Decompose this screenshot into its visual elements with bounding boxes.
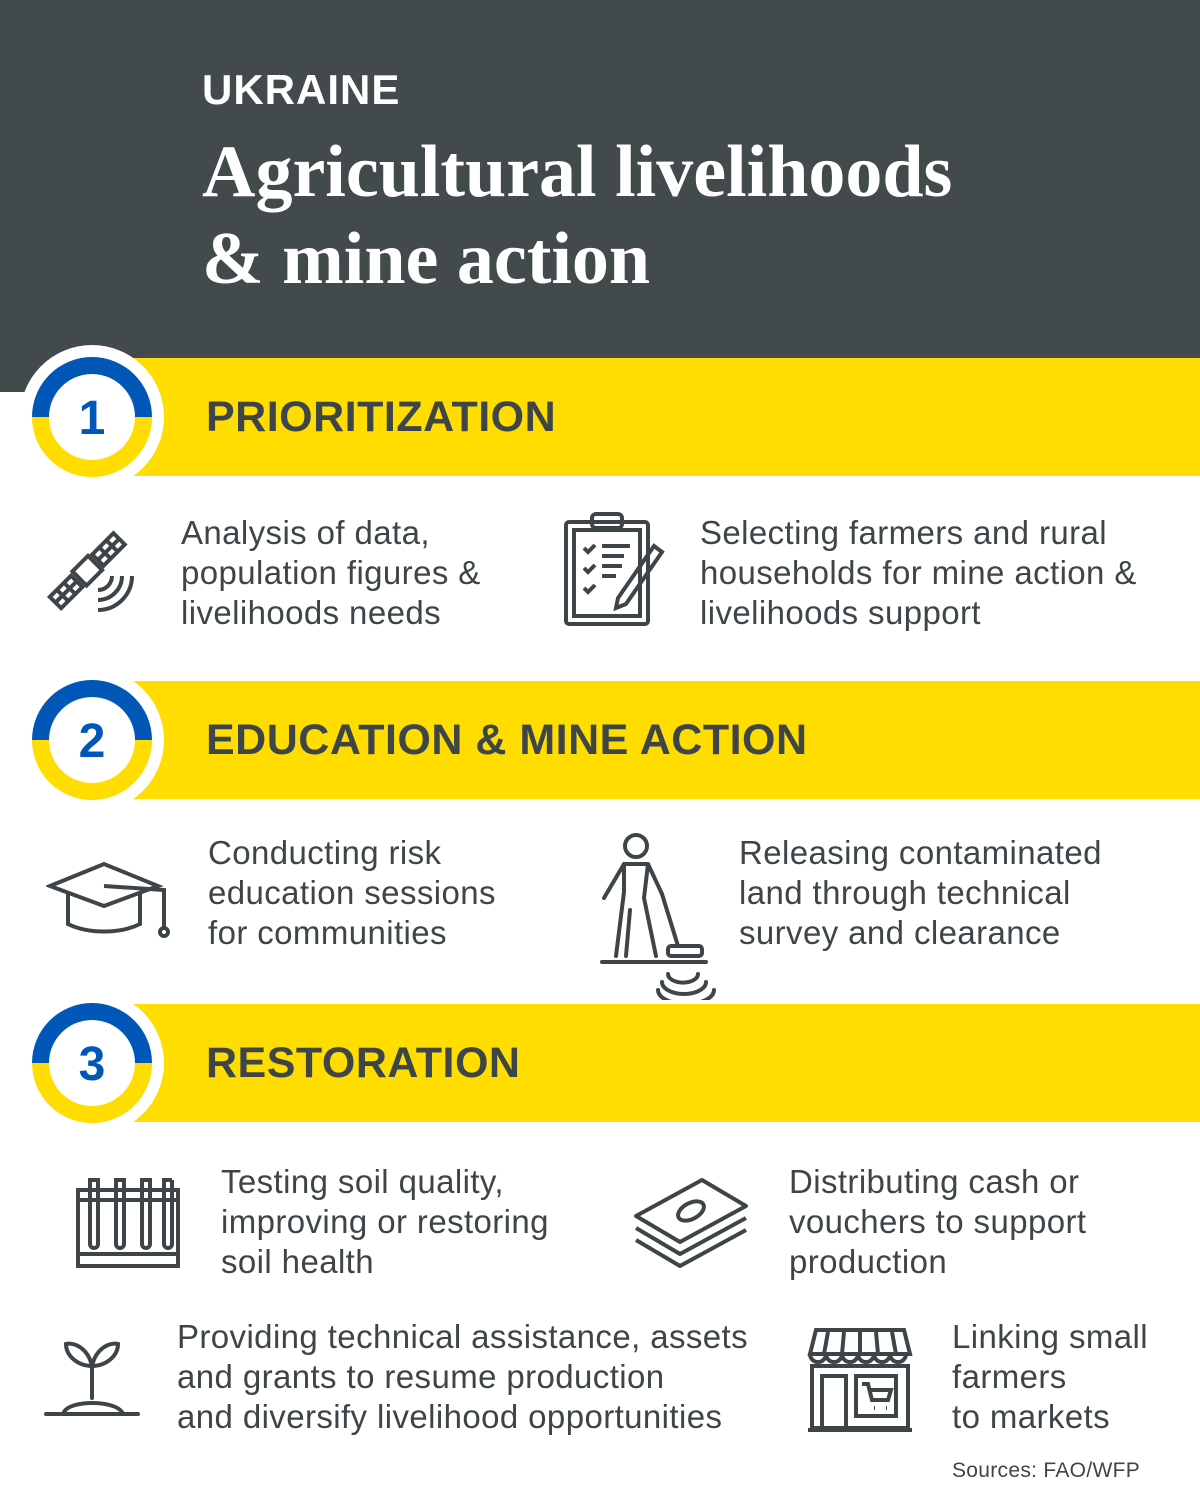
text: risk education: Conducting risk (208, 834, 441, 871)
text: technical assistance: and diversify livelihood opportunities (177, 1398, 722, 1435)
text: risk education: for communities (208, 914, 447, 951)
badge 1: 1 (79, 392, 105, 445)
title: & mine action (202, 218, 650, 300)
icon: satellite (47, 530, 134, 612)
text: cash: vouchers to support (789, 1203, 1086, 1240)
text: technical assistance: Providing technical assistance, assets (177, 1318, 748, 1355)
badge 3: 3 (79, 1038, 105, 1091)
section bar 1 (130, 358, 1200, 476)
text: selecting (700, 514, 1137, 631)
text: technical assistance: and grants to resume production (177, 1358, 665, 1395)
text: releasing land (739, 834, 1102, 951)
icon: graduation cap (46, 862, 170, 938)
section bar 1: PRIORITIZATION (206, 393, 556, 441)
badge 1 (20, 345, 164, 489)
text: soil: soil health (221, 1243, 374, 1280)
text: analysis: Analysis of data, (181, 514, 430, 551)
text: linking to markets: Linking small (952, 1318, 1148, 1355)
section bar 2 (130, 681, 1200, 799)
title (202, 131, 952, 300)
text: analysis: population figures & (181, 554, 481, 591)
header background (0, 0, 1200, 392)
text: analysis (181, 514, 481, 631)
icon: seedling (44, 1342, 140, 1416)
badge 2 (20, 668, 164, 812)
icon: test tubes (76, 1178, 180, 1268)
text: selecting: households for mine action & (700, 554, 1137, 591)
icon: cash stack (634, 1178, 748, 1268)
text: selecting: Selecting farmers and rural (700, 514, 1107, 551)
text: technical assistance (177, 1318, 748, 1435)
text: analysis: livelihoods needs (181, 594, 441, 631)
section bar 3 (130, 1004, 1200, 1122)
header text (202, 66, 952, 300)
text: linking to markets: farmers (952, 1358, 1067, 1395)
text: selecting: livelihoods support (700, 594, 981, 631)
badge 3 (20, 991, 164, 1135)
section bar 2: EDUCATION & MINE ACTION (206, 716, 808, 764)
text: linking to markets (952, 1318, 1148, 1435)
text: releasing land: land through technical (739, 874, 1071, 911)
sources: Sources: FAO/WFP (952, 1459, 1140, 1482)
text: cash: production (789, 1243, 947, 1280)
text: releasing land: Releasing contaminated (739, 834, 1102, 871)
text: releasing land: survey and clearance (739, 914, 1061, 951)
title: Agricultural livelihoods (202, 131, 952, 213)
text: cash (789, 1163, 1086, 1280)
text: soil: improving or restoring (221, 1203, 549, 1240)
kicker: UKRAINE: UKRAINE (202, 66, 400, 113)
text: linking to markets: to markets (952, 1398, 1110, 1435)
text: soil (221, 1163, 549, 1280)
text: risk education (208, 834, 496, 951)
icon: clipboard (564, 512, 665, 626)
badge 2: 2 (79, 715, 105, 768)
section bar 3: RESTORATION (206, 1039, 520, 1087)
icon: deminer with detector (600, 833, 716, 1000)
text: cash: Distributing cash or (789, 1163, 1079, 1200)
text: risk education: education sessions (208, 874, 496, 911)
text: soil: Testing soil quality, (221, 1163, 504, 1200)
icon: market shop (808, 1328, 912, 1432)
